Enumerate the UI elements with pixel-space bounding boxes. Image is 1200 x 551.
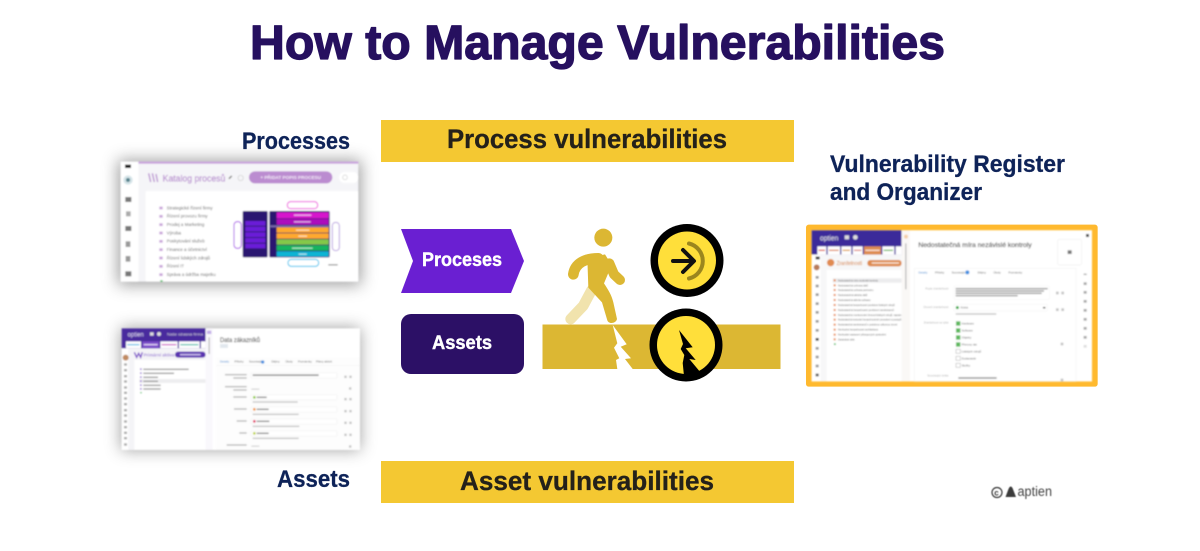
screenshot: vulnerability register: Zastaralost aktiv (838, 337, 855, 341)
screenshot: vulnerability register: Související (952, 271, 966, 275)
screenshot: vulnerability register: Nedostatečná ochrana perimetru (838, 288, 874, 292)
screenshot: process catalog: Řízení provozu firmy (167, 212, 208, 220)
screenshot: asset detail: Dějiny (271, 360, 280, 364)
heading: Vulnerability Register and Organizer (830, 151, 1065, 206)
screenshot: process catalog: Strategické řízení firmy (167, 205, 213, 211)
screenshot: vulnerability register: Nízká (961, 306, 968, 310)
screenshot: process catalog: Prodej a Marketing (167, 222, 205, 228)
banner: Process vulnerabilities (381, 120, 794, 162)
heading: Processes: Processes (242, 128, 350, 155)
screenshot: process catalog: Výroba (167, 230, 181, 236)
screenshot: asset detail: optien (128, 332, 144, 339)
screenshot: vulnerability register: Úroveň zranitelnosti (923, 304, 949, 309)
box: Assets: Assets (432, 333, 492, 354)
screenshot shadow: asset detail (121, 328, 360, 450)
screenshot: asset detail: Poznámky (298, 360, 312, 364)
screenshot: vulnerability register: Přílohy (935, 271, 945, 275)
title: How to Manage Vulnerabilities (250, 17, 945, 70)
screenshot: asset detail (122, 328, 360, 450)
icon: walking person (571, 229, 620, 323)
screenshot: asset detail: Plány aktivit (316, 360, 332, 364)
screenshot: vulnerability register: Hardware (962, 321, 974, 325)
chevron: Proceses (401, 229, 524, 293)
screenshot: vulnerability register (806, 225, 1098, 387)
icon: cracked ground bar (542, 324, 780, 369)
screenshot: process catalog: Katalog procesů (163, 173, 225, 183)
footer logo: copyright aptien: aptien (1018, 484, 1052, 499)
screenshot: vulnerability register: Nedostatečná aktivita softwaru (838, 298, 871, 302)
screenshot: vulnerability register: optien (820, 234, 838, 243)
heading: Vulnerability Register and Organizer: Vulnerability Register (830, 151, 1065, 178)
screenshot: vulnerability register: Dodavatelé (962, 356, 976, 360)
screenshot: asset detail: Primární aktiva (144, 353, 175, 358)
screenshot: vulnerability register: Související rizika (927, 374, 949, 378)
screenshot: vulnerability register: Objekty (962, 335, 972, 339)
screenshot: vulnerability register: Nevhodné nastavení přístupových oprávnění (838, 333, 886, 337)
screenshot: vulnerability register: Poznámky (1008, 271, 1023, 275)
screenshot: vulnerability register: Služby (962, 363, 971, 367)
screenshot: vulnerability register: Lidských zdrojů (962, 349, 982, 353)
screenshot: vulnerability register: Dějiny (978, 271, 986, 275)
screenshot: vulnerability register: Detaily (918, 271, 928, 275)
screenshot: vulnerability register: Nedostatečná ochrana dátů (838, 283, 868, 287)
screenshot: process catalog (121, 162, 358, 282)
screenshot: vulnerability register: Nedostatečná bezpečnostní povědomí lidských zdrojů (838, 303, 895, 307)
screenshot: asset detail: Data zákazníků (220, 336, 260, 344)
screenshot: vulnerability register: Software (962, 328, 973, 332)
screenshot: vulnerability register: Nedostatečná bezpečnostní povědomí zaměstnanců (838, 308, 894, 312)
screenshot: asset detail: Detaily (220, 360, 230, 364)
screenshot: asset detail: Naše úžasná firma (167, 332, 204, 336)
heading: Vulnerability Register and Organizer: and Organizer (830, 179, 982, 206)
screenshot: vulnerability register: Přenosy dat (962, 342, 977, 346)
screenshot: vulnerability register: Nedostatečná zaměstnanců s podobnou odbornou úrovní (838, 323, 898, 327)
screenshot shadow: process catalog (118, 160, 361, 285)
heading: Assets: Assets (277, 466, 350, 493)
screenshot: vulnerability register: Nevhodné bezpečnostní architektura (838, 328, 878, 332)
screenshot: process catalog: Poskytování služeb (167, 239, 205, 245)
screenshot: vulnerability register: Nedostatečná monitorování činnosti lidských zdrojů, napsán (838, 313, 902, 317)
box: Assets (401, 314, 524, 374)
yellow frame (806, 225, 1098, 387)
screenshot: vulnerability register: Nedostatečná míra nezávislé kontroly (918, 242, 1032, 249)
screenshot: vulnerability register: Úkoly (993, 270, 1001, 275)
screenshot: vulnerability register: Zranitelnost se týká (924, 320, 949, 324)
footer logo: copyright aptien: c (994, 488, 999, 498)
screenshot: asset detail: Přílohy (234, 360, 244, 364)
banner: Asset vulnerabilities: Asset vulnerabilities (460, 466, 714, 496)
screenshot: process catalog: Řízení IT (167, 262, 184, 270)
screenshot: asset detail: Úkoly (285, 359, 293, 364)
footer logo: copyright aptien (992, 484, 1052, 499)
screenshot: process catalog: Řízení lidských zdrojů (167, 253, 210, 261)
screenshot: vulnerability register: Zranitelnosti (837, 261, 862, 267)
screenshot: vulnerability register: Nedostatečná testování bezpečnostních provedení a postupů (838, 318, 902, 322)
screenshot: asset detail: Související (249, 360, 264, 364)
screenshot: process catalog: Správa a údržba majetku (167, 272, 216, 278)
screenshot: vulnerability register: Popis zranitelnosti (925, 286, 949, 290)
icon: threat arrow badge (650, 224, 724, 297)
screenshot: vulnerability register: Nedostatečná aktivita dátů (838, 293, 868, 297)
banner: Asset vulnerabilities (381, 461, 794, 503)
chevron: Proceses: Proceses (422, 250, 502, 271)
icon: vulnerability crack badge (650, 308, 722, 382)
screenshot: process catalog: Finance a účetnictví (167, 247, 208, 253)
banner: Process vulnerabilities: Process vulnerabilities (447, 124, 727, 154)
screenshot: vulnerability register: Nedostatečná míra nezávislé kontroly (838, 278, 879, 282)
screenshot: process catalog: + PŘIDAT POPIS PROCESU (260, 175, 321, 180)
